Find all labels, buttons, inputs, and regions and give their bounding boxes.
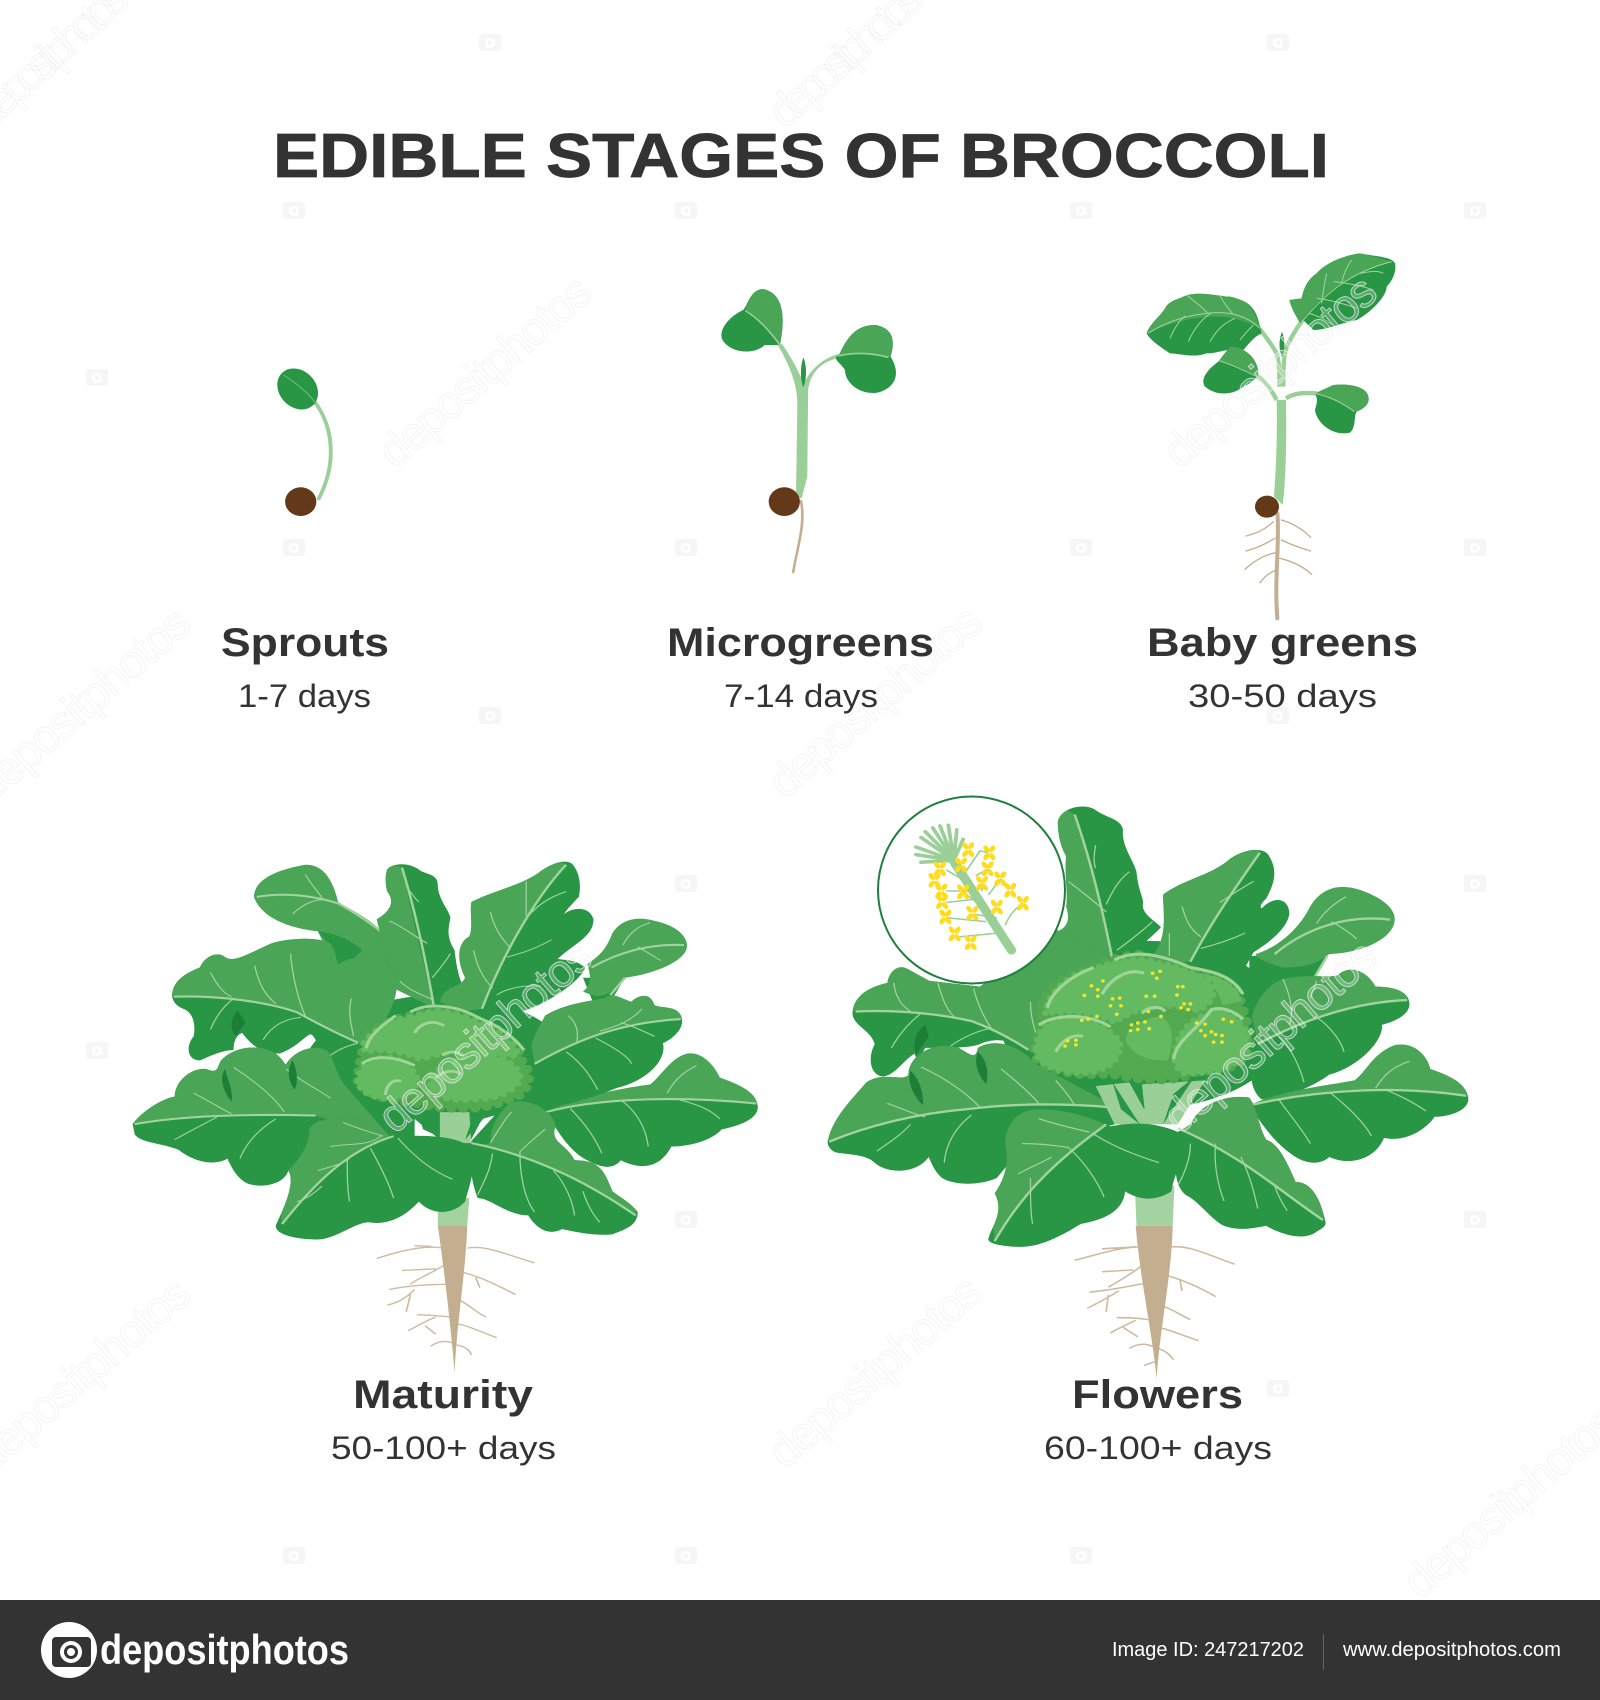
footer url: www.depositphotos.com	[1342, 1639, 1561, 1661]
image id: Image ID: 247217202	[1112, 1639, 1304, 1661]
sprout illustration	[271, 364, 331, 516]
flowers leaf: lower left large	[828, 1043, 1114, 1184]
maturity leaf: far right small	[583, 919, 687, 1019]
maturity leaf: front left	[276, 1118, 472, 1240]
label: flowers: 60-100+ days	[1044, 1430, 1272, 1466]
maturity leaf: top centre	[376, 864, 462, 1005]
label: maturity: 50-100+ days	[331, 1430, 556, 1466]
footer logo icon	[41, 1622, 97, 1678]
label: baby greens: Baby greens	[1147, 621, 1418, 665]
footer logo text: depositphotos	[100, 1626, 349, 1673]
flowers leaf: front right	[1176, 1096, 1326, 1236]
flowers leaf: right upper	[1252, 970, 1410, 1100]
flowers plant illustration	[828, 799, 1468, 1379]
maturity broccoli head	[358, 1006, 529, 1143]
watermark text: depositphotos	[757, 1264, 992, 1478]
label: sprouts	[221, 621, 389, 714]
label: microgreens: Microgreens	[667, 621, 934, 665]
flowers leaf: right low	[1252, 1044, 1468, 1163]
watermark text: depositphotos	[757, 594, 992, 808]
flowers broccoli head	[1034, 954, 1250, 1124]
label: baby greens: 30-50 days	[1188, 678, 1377, 714]
maturity leaf: right upper	[532, 996, 682, 1106]
label: microgreens	[667, 621, 934, 714]
flowers leaf: far right small	[1249, 887, 1395, 1006]
maturity backing foliage	[301, 995, 579, 1160]
watermark text: depositphotos	[367, 929, 602, 1143]
label: sprouts: Sprouts	[221, 621, 389, 665]
watermark camera icons	[86, 34, 1486, 1564]
maturity plant illustration	[133, 857, 758, 1372]
flowers roots	[1075, 1186, 1235, 1379]
maturity leaf: right low	[541, 1043, 758, 1167]
flowers backing foliage	[1001, 941, 1287, 1109]
maturity leaf: upper left large	[172, 938, 396, 1060]
label: flowers: Flowers	[1072, 1373, 1243, 1417]
label: flowers	[1044, 1373, 1272, 1466]
maturity roots	[377, 1198, 535, 1372]
broccoli yellow buds	[1065, 971, 1232, 1046]
watermark text: depositphotos	[1152, 264, 1387, 478]
baby greens illustration	[1147, 253, 1395, 618]
label: baby greens	[1147, 621, 1418, 714]
label: microgreens: 7-14 days	[724, 678, 878, 714]
label: maturity	[331, 1373, 556, 1466]
flowers leaf: top centre	[1058, 806, 1161, 958]
label: maturity: Maturity	[353, 1373, 534, 1417]
flowers leaf: front left	[988, 1109, 1178, 1247]
maturity leaf: top right	[436, 857, 594, 1019]
footer divider	[1323, 1634, 1324, 1670]
footer bar	[0, 1600, 1600, 1700]
flower sprig	[916, 825, 1030, 951]
flowers leaf: top right	[1154, 850, 1290, 966]
watermark text: depositphotos	[1152, 929, 1387, 1143]
flower detail callout circle	[878, 796, 1065, 984]
microgreens illustration	[721, 289, 896, 573]
flowers leaf: upper left large	[852, 930, 1111, 1077]
maturity leaf: front right	[471, 1101, 638, 1235]
maturity leaf: top left	[254, 865, 398, 978]
watermark text: depositphotos	[367, 264, 602, 478]
label: sprouts: 1-7 days	[238, 678, 371, 714]
title: EDIBLE STAGES OF BROCCOLI	[273, 122, 1329, 191]
maturity leaf: lower left large	[133, 1040, 394, 1186]
